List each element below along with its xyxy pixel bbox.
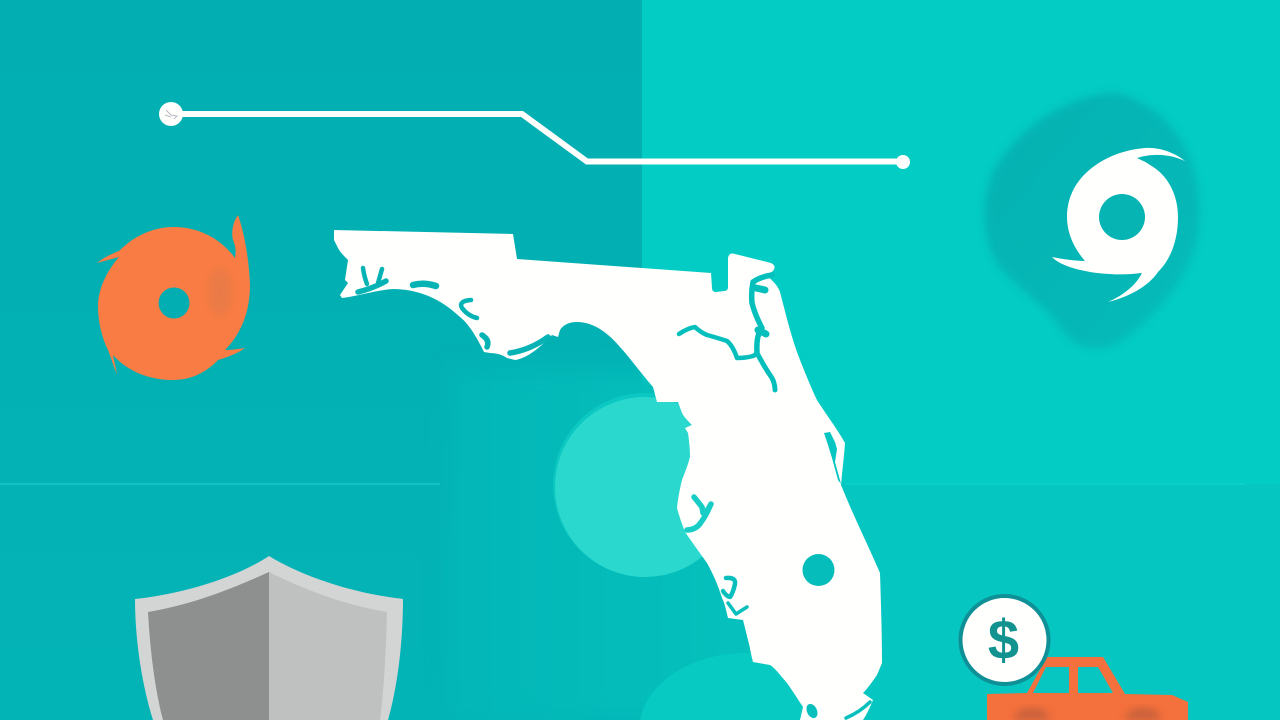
icon: orange hurricane [97,215,250,380]
lake Okeechobee [802,554,834,586]
icon: white hurricane with shadow [985,93,1200,348]
dollar sign: $ [988,608,1019,671]
icon: orange truck [987,657,1188,720]
route line [159,102,910,174]
icon: shield [135,556,403,720]
water: Tampa Bay [687,497,711,530]
water: southwest bays [723,578,870,718]
light teal circle behind map [553,393,737,577]
map: Florida [334,230,882,720]
water: panhandle bays [358,268,548,353]
icon: dollar coin [960,596,1048,684]
water: northeast rivers [679,275,775,390]
water: east coast lagoon [824,432,841,484]
water: southern tip bay [804,702,820,720]
lower teal circle [640,653,850,720]
